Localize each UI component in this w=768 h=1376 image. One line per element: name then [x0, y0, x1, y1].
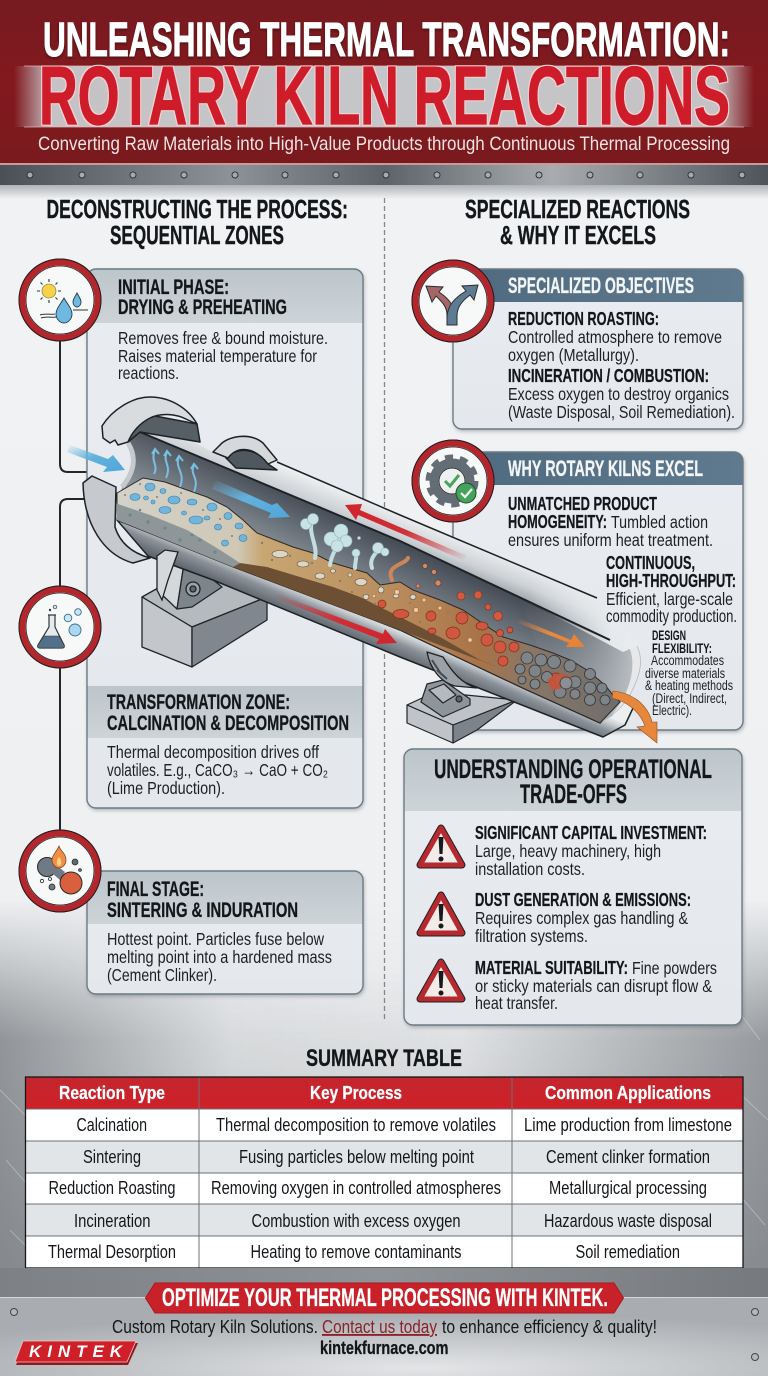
- table header row: Common Applications: [545, 1083, 711, 1103]
- interior flow arrow blue: [212, 480, 290, 518]
- text: capital investment: installation costs.: [475, 859, 585, 879]
- panel: specialized objectives: [453, 269, 744, 431]
- table row: sintering: Cement clinker formation: [546, 1147, 710, 1167]
- text: capital investment: Large, heavy machinery, high: [475, 841, 661, 861]
- icon: sun and water: [19, 259, 101, 341]
- text: design flexibility: & heating methods: [645, 678, 733, 693]
- table row: calcination: Lime production from limestone: [524, 1115, 732, 1135]
- text: reduction roasting: Controlled atmosphere to remove: [508, 327, 722, 347]
- text: material suitability: or sticky materials can disrupt flow &: [475, 976, 712, 996]
- heading: initial phase: INITIAL PHASE:: [118, 276, 229, 299]
- sintering nodules: [378, 600, 563, 687]
- heading: transformation zone: TRANSFORMATION ZONE:: [107, 691, 290, 714]
- text: final stage body: (Cement Clinker).: [107, 965, 217, 985]
- heading: initial phase: DRYING & PREHEATING: [118, 296, 287, 319]
- text: material suitability: Fine powders: [632, 958, 717, 978]
- text: material suitability: heat transfer.: [475, 993, 558, 1013]
- icon: warning 3: [420, 962, 462, 999]
- text: design flexibility: (Direct, Indirect,: [652, 691, 727, 706]
- text: capital investment: [475, 822, 707, 879]
- table row: calcination: Calcination: [76, 1115, 147, 1135]
- clinker pebbles: [515, 652, 610, 706]
- icon: diverging arrows: [412, 260, 494, 342]
- contact line: to enhance efficiency & quality!: [442, 1316, 657, 1337]
- table row: calcination: Thermal decomposition to remove volatiles: [216, 1115, 496, 1135]
- text: final stage body: melting point into a hardened mass: [107, 947, 332, 967]
- panel: operational trade-offs: [404, 749, 743, 1027]
- summary table: [25, 1077, 743, 1268]
- table header row: Key Process: [310, 1083, 402, 1103]
- table row: reduction roasting: [48, 1178, 707, 1198]
- icon: warning 1: [420, 828, 462, 865]
- table row: reduction roasting: Removing oxygen in controlled atmospheres: [211, 1178, 501, 1198]
- entry flange lower: [83, 443, 150, 563]
- title header: [0, 0, 768, 165]
- table row: reduction roasting: Metallurgical processing: [549, 1178, 707, 1198]
- heading: summary table: SUMMARY TABLE: [306, 1045, 462, 1072]
- contact line: Custom Rotary Kiln Solutions.: [112, 1316, 318, 1337]
- text: dust emissions: [475, 889, 691, 946]
- heading: final stage: FINAL STAGE:: [107, 878, 204, 901]
- text: incineration: [508, 365, 735, 422]
- timeline connectors: [60, 335, 90, 835]
- text: homogeneity: [508, 493, 713, 550]
- kiln support left: [142, 552, 267, 667]
- text: dust emissions: filtration systems.: [475, 926, 588, 946]
- text: throughput: CONTINUOUS,: [606, 552, 695, 573]
- hot particles: [416, 564, 502, 620]
- table row: sintering: [83, 1147, 710, 1167]
- text: homogeneity: UNMATCHED PRODUCT: [508, 493, 657, 514]
- heading: initial phase: [118, 276, 287, 319]
- text: throughput: [606, 552, 737, 626]
- text: transformation body: (Lime Production).: [107, 778, 225, 798]
- icon: sintering particles: [19, 830, 101, 912]
- panel: final stage: [87, 871, 364, 996]
- calcination lumps: [272, 550, 416, 600]
- table row: incineration: Incineration: [74, 1211, 150, 1231]
- text: design flexibility: Accommodates: [651, 653, 724, 668]
- heading: specialized reactions: [465, 194, 690, 250]
- table header row: [59, 1083, 711, 1103]
- heading: transformation zone: [107, 691, 349, 735]
- heading: deconstructing the process: SEQUENTIAL ZONES: [110, 220, 284, 250]
- table row: incineration: [74, 1211, 712, 1231]
- heading: transformation zone: CALCINATION & DECOMPOSITION: [107, 712, 349, 735]
- text: final stage body: [107, 929, 332, 985]
- heading: final stage: [107, 878, 298, 922]
- heading: final stage: SINTERING & INDURATION: [107, 899, 298, 922]
- heading: specialized reactions: & WHY IT EXCELS: [500, 220, 656, 250]
- icon: flask: [19, 586, 101, 668]
- material flow arrow orange: [518, 619, 585, 647]
- text: transformation body: [107, 742, 328, 798]
- table row: thermal desorption: Soil remediation: [576, 1242, 680, 1262]
- text: homogeneity: ensures uniform heat treatment.: [508, 530, 713, 550]
- heading: deconstructing the process: [46, 194, 348, 250]
- table row: thermal desorption: Heating to remove contaminants: [250, 1242, 462, 1262]
- text: throughput: Efficient, large-scale: [606, 589, 733, 609]
- text: transformation body: Thermal decomposition drives off: [107, 742, 319, 762]
- heading: trade-offs: TRADE-OFFS: [520, 779, 627, 809]
- text: material suitability: MATERIAL SUITABILITY:: [475, 957, 628, 978]
- table row: calcination: [76, 1115, 732, 1135]
- text: design flexibility: DESIGN: [652, 627, 686, 643]
- logo: KINTEK: [29, 1342, 124, 1361]
- table header row: Reaction Type: [59, 1083, 165, 1103]
- table row: sintering: Fusing particles below melting point: [239, 1147, 474, 1167]
- text: initial phase body: Raises material temperature for: [118, 346, 317, 366]
- flange lower right: [427, 652, 477, 688]
- text: design flexibility: FLEXIBILITY:: [652, 640, 712, 656]
- discharge arrow: [612, 691, 657, 743]
- text: homogeneity: Tumbled action: [611, 512, 708, 532]
- icon: warning 2: [420, 895, 462, 933]
- table row: thermal desorption: Thermal Desorption: [48, 1242, 176, 1262]
- panel: why rotary kilns excel: [453, 452, 744, 732]
- gas flow arrow upper: [345, 504, 467, 560]
- water droplets: [130, 483, 247, 546]
- illustration: cutaway rotary kiln: [67, 397, 657, 743]
- light and dark grit: [124, 483, 471, 629]
- material bed: [115, 478, 620, 723]
- footer: [0, 1268, 768, 1376]
- lower kiln shell: [117, 520, 634, 737]
- text: transformation body: volatiles. E.g., CaCO₃ → CaO + CO₂: [107, 760, 328, 780]
- gas flow arrow lower: [275, 594, 397, 644]
- kiln interior: [117, 432, 640, 723]
- feed arrow: [67, 445, 125, 472]
- text: design flexibility: Electric).: [652, 703, 692, 718]
- gray specks in lower layer: [128, 509, 217, 554]
- text: reduction roasting: REDUCTION ROASTING:: [508, 308, 659, 329]
- text: initial phase body: reactions.: [118, 363, 179, 383]
- text: design flexibility: diverse materials: [645, 666, 725, 681]
- upper kiln shell: [140, 428, 625, 646]
- logo: [15, 1341, 138, 1365]
- table row: thermal desorption: [48, 1242, 680, 1262]
- contact line: [112, 1316, 657, 1337]
- table row: incineration: Combustion with excess oxygen: [252, 1211, 460, 1231]
- text: final stage body: Hottest point. Particles fuse below: [107, 929, 324, 949]
- text: initial phase body: [118, 328, 328, 383]
- far end lip: [610, 636, 640, 716]
- icon: gear with checks: [412, 440, 494, 522]
- text: dust emissions: Requires complex gas handling &: [475, 908, 688, 928]
- riveted steel bar: [0, 165, 768, 185]
- kiln support right: [407, 680, 517, 743]
- flange upper middle: [213, 436, 277, 470]
- steam clouds: [300, 514, 408, 580]
- heading: deconstructing the process: DECONSTRUCTING THE PROCESS:: [46, 194, 348, 224]
- table row: reduction roasting: Reduction Roasting: [48, 1178, 176, 1198]
- contact line: Contact us today: [322, 1316, 438, 1337]
- text: reduction roasting: oxygen (Metallurgy).: [508, 345, 639, 365]
- heading: trade-offs: [434, 754, 712, 809]
- vapor arrows: [152, 449, 198, 492]
- text: material suitability: [475, 957, 717, 1013]
- table row: sintering: Sintering: [83, 1147, 141, 1167]
- text: reduction roasting: [508, 308, 722, 365]
- entry flange upper: [102, 397, 200, 445]
- website: kintekfurnace.com: [320, 1337, 448, 1358]
- panel: initial phase and transformation zone: [87, 269, 364, 810]
- text: initial phase body: Removes free & bound moisture.: [118, 328, 328, 348]
- text: homogeneity: HOMOGENEITY:: [508, 511, 607, 532]
- flange lower left: [157, 550, 178, 600]
- text: design flexibility: [645, 627, 733, 718]
- table row: incineration: Hazardous waste disposal: [544, 1211, 712, 1231]
